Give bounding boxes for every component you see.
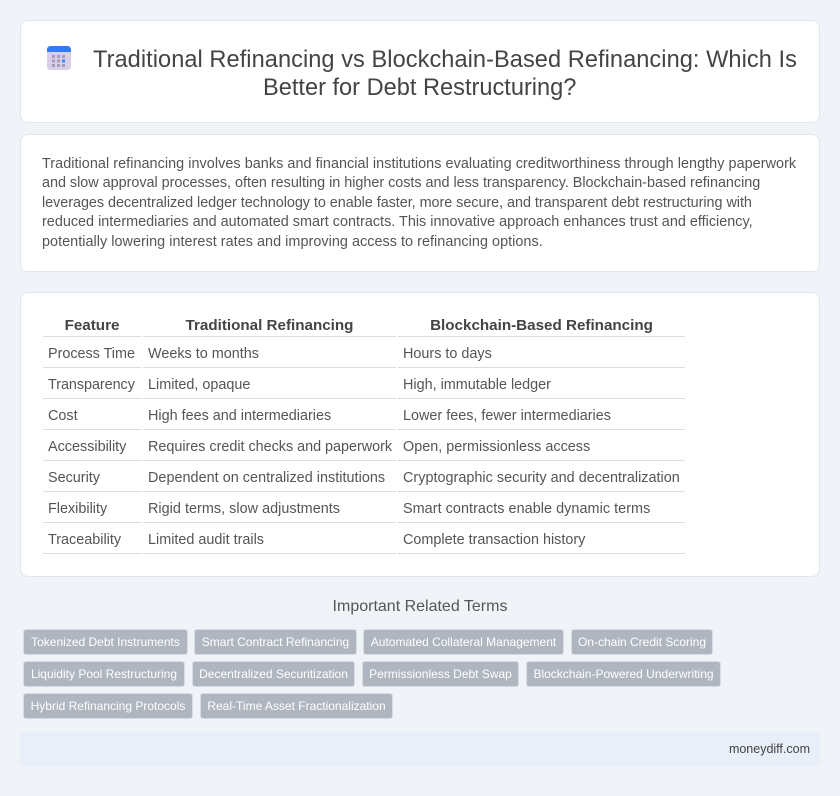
- comparison table: Security: [48, 470, 100, 486]
- header card: [20, 20, 820, 123]
- intro text: [42, 156, 796, 250]
- related terms tags: Real-Time Asset Fractionalization: [207, 699, 386, 713]
- comparison table: Process Time: [48, 346, 135, 362]
- related terms tags: Permissionless Debt Swap: [369, 667, 512, 681]
- comparison table: Traditional Refinancing: [186, 317, 353, 334]
- intro text: Traditional refinancing involves banks and financial institutions evaluating creditworthiness through lengthy paperwork: [42, 156, 796, 172]
- comparison table: Smart contracts enable dynamic terms: [403, 501, 650, 517]
- related terms tags: Liquidity Pool Restructuring: [31, 667, 177, 681]
- footer bar: [20, 732, 820, 766]
- related terms tags: On-chain Credit Scoring: [578, 635, 706, 649]
- comparison table: Cost: [48, 408, 78, 424]
- title: Better for Debt Restructuring?: [263, 75, 576, 101]
- related terms tags: Tokenized Debt Instruments: [31, 635, 180, 649]
- comparison table: Complete transaction history: [403, 532, 585, 548]
- comparison table: Limited audit trails: [148, 532, 264, 548]
- comparison table: Transparency: [48, 377, 135, 393]
- related terms heading: Important Related Terms: [333, 598, 507, 615]
- comparison table: Rigid terms, slow adjustments: [148, 501, 340, 517]
- comparison table: Lower fees, fewer intermediaries: [403, 408, 611, 424]
- comparison table: Flexibility: [48, 501, 107, 517]
- comparison table: High fees and intermediaries: [148, 408, 331, 424]
- comparison table: Requires credit checks and paperwork: [148, 439, 392, 455]
- comparison table: High, immutable ledger: [403, 377, 551, 393]
- comparison table: Feature: [65, 317, 119, 334]
- intro card: [20, 134, 820, 272]
- comparison table: Hours to days: [403, 346, 492, 362]
- icon: calendar: [47, 46, 71, 70]
- comparison table: Traceability: [48, 532, 121, 548]
- source credit: moneydiff.com: [729, 742, 810, 756]
- title: Traditional Refinancing vs Blockchain-Based Refinancing: Which Is: [93, 47, 797, 73]
- intro text: and slow approval processes, often resulting in higher costs and less transparency. Blockchain-based refinancing: [42, 175, 760, 191]
- related terms tags: Hybrid Refinancing Protocols: [31, 699, 185, 713]
- comparison table: Cryptographic security and decentralization: [403, 470, 680, 486]
- comparison table: Limited, opaque: [148, 377, 250, 393]
- intro text: reduced intermediaries and automated smart contracts. This innovative approach enhances trust and efficiency,: [42, 214, 753, 230]
- table card: [20, 292, 820, 577]
- comparison table: Accessibility: [48, 439, 126, 455]
- title: [93, 47, 797, 101]
- related terms tags: Automated Collateral Management: [371, 635, 556, 649]
- related terms tags: Smart Contract Refinancing: [202, 635, 349, 649]
- comparison table: Open, permissionless access: [403, 439, 590, 455]
- comparison table: Weeks to months: [148, 346, 259, 362]
- comparison table: [43, 317, 685, 554]
- related terms tags: [23, 629, 721, 719]
- comparison table: Blockchain-Based Refinancing: [430, 317, 653, 334]
- comparison table: Dependent on centralized institutions: [148, 470, 385, 486]
- intro text: potentially lowering interest rates and improving access to refinancing options.: [42, 234, 543, 250]
- related terms tags: Decentralized Securitization: [199, 667, 348, 681]
- intro text: leverages decentralized ledger technology to enable faster, more secure, and transparent debt restructuring with: [42, 195, 752, 211]
- related terms tags: Blockchain-Powered Underwriting: [533, 667, 714, 681]
